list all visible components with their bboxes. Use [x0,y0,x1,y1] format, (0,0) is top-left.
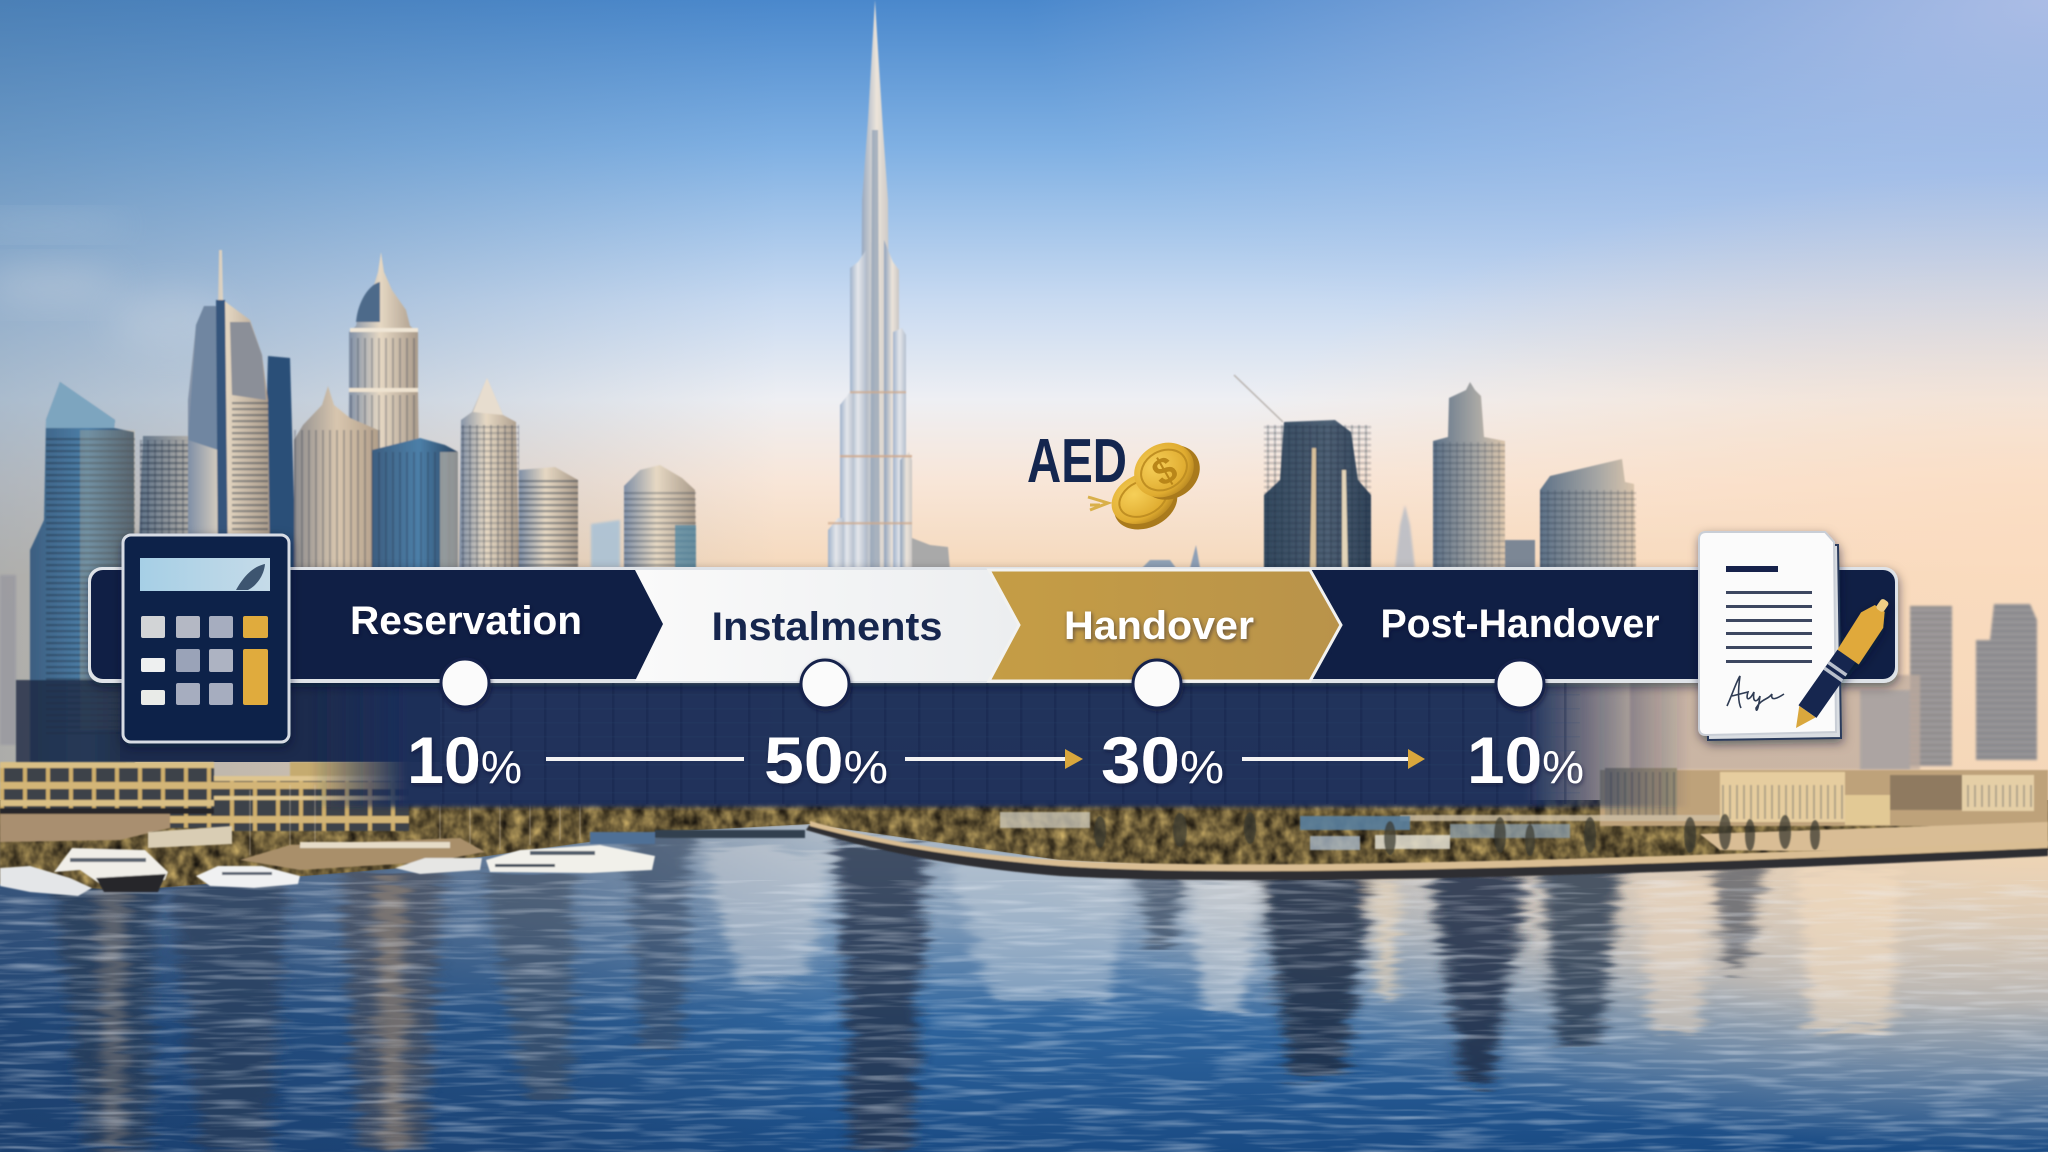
coin arrow [1088,497,1108,510]
tower: glass left [16,382,135,765]
band base [88,567,1898,683]
icon: AED coins [1027,427,1210,539]
back sheet [1708,545,1841,740]
band navy bar [91,570,1895,679]
burj left tier upper [850,250,866,570]
stone terrace [0,814,170,842]
right lower waterfront buildings [1400,768,2048,852]
marina pavilion [148,826,232,848]
calculator screen [140,558,270,591]
large yacht [486,845,655,873]
chevron: handover [989,570,1341,681]
label: reservation: Reservation [350,599,582,643]
signature [1727,676,1784,710]
burj left tier mid [840,392,854,570]
tower: cream mid-rise [138,436,214,570]
tower: twin spire [188,250,270,570]
percentage row panel [310,682,1690,807]
icon: signed contract with pen [1699,532,1898,740]
burj right tier low [900,452,912,570]
medium boat [395,858,482,874]
sky background [0,0,2048,860]
shoreline land strip [0,800,2048,890]
chevron: instalments [635,570,1019,681]
water surface [0,820,2048,1152]
chevron: post-handover [1318,572,1696,678]
tower: ornate beige [294,386,380,570]
distant right skyline [0,505,2037,770]
stage band [88,567,1898,683]
yacht left [54,848,168,892]
tower: striped mid-rise [519,467,578,570]
timeline dots [441,659,1544,708]
heading rule [1726,566,1778,572]
tower: tall centre right [1433,382,1505,570]
promenade trees and facilities [806,812,2048,880]
coin upper: $ [1145,448,1185,495]
dot 4 [1496,660,1544,708]
label: handover: Handover [1064,604,1254,648]
left skyline towers [16,250,696,765]
left lower waterfront buildings [0,762,410,842]
text lines [1726,591,1812,663]
label: instalments: Instalments [712,605,942,649]
calculator keys [141,616,268,705]
right skyline towers [1142,375,1636,570]
building reflections [52,836,1900,1152]
tower: teal glass [372,438,458,570]
front sheet [1699,532,1836,735]
stage labels [350,599,1660,649]
dot 3 [1133,660,1181,708]
value 10%: 10% [407,723,522,797]
mast lines [250,785,580,860]
building: gold framed left [0,762,214,828]
value 50%: 50% [764,723,888,797]
pen [1785,593,1898,737]
percentages [407,723,1584,797]
value 10% final: 10% [1467,723,1584,797]
dot 1 [441,659,489,707]
tower: pointed gothic [459,378,519,570]
building: gold framed right [214,762,410,831]
small boats left [0,866,92,896]
connector arrow 2 [905,749,1083,769]
tower: angled roof [1540,459,1636,570]
dark shade behind band left side [120,682,440,762]
icon: calculator [123,535,289,742]
value 30%: 30% [1101,723,1224,797]
Burj Khalifa tower [828,0,950,570]
coin lower [1103,462,1186,539]
quay edge [806,824,2048,880]
low buildings near band [1142,540,1535,570]
water ripples [0,880,2048,1152]
label: post-handover: Post-Handover [1380,602,1660,646]
small yacht [196,866,300,888]
burj right tier upper [884,240,899,570]
tower: dark stepped [1234,375,1371,570]
warm boat row [240,838,485,870]
coin upper [1124,430,1210,512]
AED label: AED [1027,427,1127,496]
tower: spired crown [347,252,420,570]
dot 2 [801,660,849,708]
burj right tier mid [893,328,906,570]
connector line 1 [546,757,744,761]
chevron: reservation [289,572,663,679]
tower: dark blue slim [262,356,296,570]
tower: cream high-rise [624,465,696,570]
connector arrow 3 [1242,749,1425,769]
marina with yachts [0,785,805,896]
burj spire and shaft [860,0,890,570]
burj left tier low [828,518,844,570]
